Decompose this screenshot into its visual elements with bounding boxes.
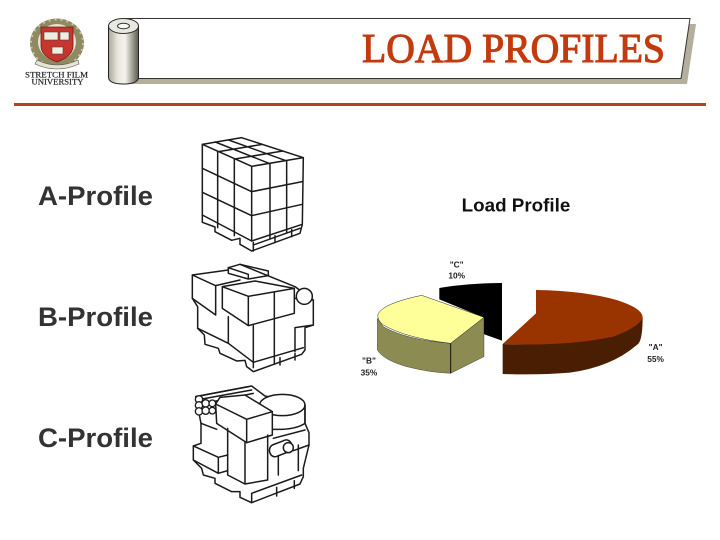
banner shadow bbox=[131, 24, 696, 84]
illustration: B-profile pallet bbox=[192, 264, 313, 372]
label B: "B" bbox=[362, 355, 376, 365]
pie chart: 10% bbox=[448, 271, 466, 281]
illustration: A-profile pallet bbox=[202, 138, 303, 251]
logo: university crest bbox=[25, 18, 88, 86]
wreath bbox=[30, 18, 84, 68]
logo text: STRETCH FILM bbox=[25, 70, 88, 80]
label: B-Profile: B-Profile bbox=[38, 302, 153, 332]
film roll icon bbox=[108, 18, 138, 84]
label C: "C" bbox=[450, 259, 464, 269]
chart title: Load Profile bbox=[462, 194, 570, 215]
motto ribbon bbox=[35, 60, 79, 69]
banner body bbox=[122, 18, 690, 78]
slice: A 55% bbox=[503, 290, 643, 374]
label: C-Profile: C-Profile bbox=[38, 423, 153, 453]
pie chart: 35% bbox=[361, 367, 378, 377]
shield books bbox=[44, 32, 58, 40]
illustration: C-profile pallet bbox=[193, 386, 309, 503]
shield bbox=[41, 27, 73, 62]
slice: B 35% bbox=[377, 295, 484, 373]
pie chart bbox=[361, 194, 665, 377]
title banner bbox=[108, 18, 696, 84]
label: A-Profile: A-Profile bbox=[38, 181, 153, 211]
slice: C 10% bbox=[439, 283, 502, 341]
title text: LOAD PROFILES bbox=[362, 25, 665, 71]
label A: "A" bbox=[649, 342, 663, 352]
logo: university crest: UNIVERSITY bbox=[32, 76, 84, 86]
pie chart: 55% bbox=[647, 354, 665, 364]
header rule bbox=[14, 103, 706, 106]
